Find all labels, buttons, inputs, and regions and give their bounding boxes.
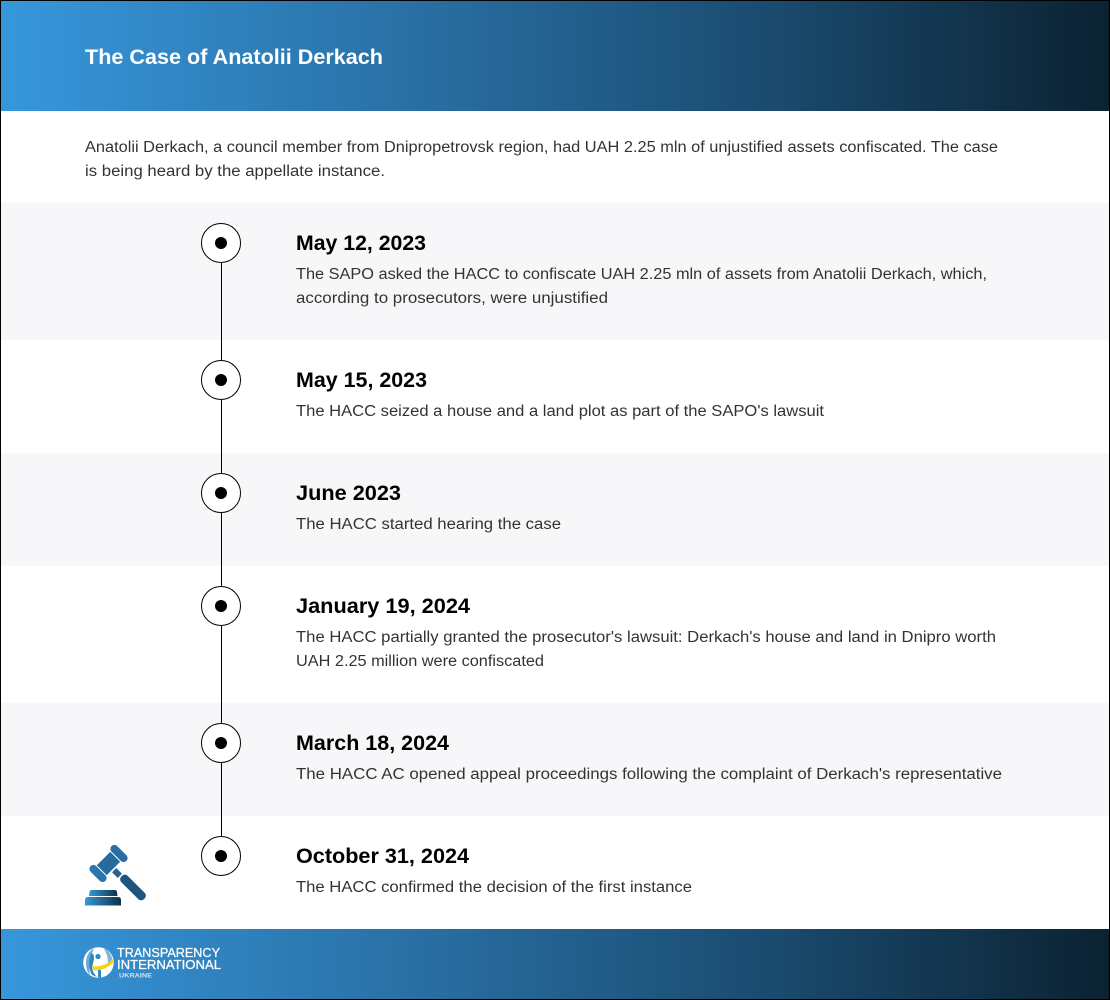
header band <box>0 0 1110 111</box>
intro text: is being heard by the appellate instance. <box>85 163 385 180</box>
date: January 19, 2024 <box>296 595 470 618</box>
date: March 18, 2024 <box>296 732 449 755</box>
timeline event: March 18, 2024 <box>202 724 1002 783</box>
logo text: UKRAINE <box>119 972 153 980</box>
intro text: Anatolii Derkach, a council member from Dnipropetrovsk region, had UAH 2.25 mln of unjustified assets confiscated. The case <box>85 139 998 156</box>
description <box>296 266 987 307</box>
title: The Case of Anatolii Derkach <box>85 46 383 69</box>
marker <box>202 224 240 262</box>
marker <box>202 836 240 876</box>
date: May 15, 2023 <box>296 369 427 392</box>
marker <box>202 724 240 762</box>
description: The HACC confirmed the decision of the first instance <box>296 879 692 896</box>
description: The SAPO asked the HACC to confiscate UAH 2.25 mln of assets from Anatolii Derkach, which, <box>296 266 987 283</box>
date: May 12, 2023 <box>296 232 426 255</box>
intro text <box>85 139 998 180</box>
description: according to prosecutors, were unjustified <box>296 290 608 307</box>
row backgrounds <box>0 203 1110 816</box>
marker <box>202 474 240 512</box>
marker <box>202 586 240 626</box>
timeline line <box>221 243 222 856</box>
description: The HACC seized a house and a land plot as part of the SAPO's lawsuit <box>296 403 825 420</box>
description: UAH 2.25 million were confiscated <box>296 653 544 670</box>
timeline event: May 15, 2023 <box>202 360 825 420</box>
timeline event: January 19, 2024 <box>202 586 996 670</box>
date: June 2023 <box>296 482 401 505</box>
description: The HACC partially granted the prosecutor's lawsuit: Derkach's house and land in Dnipro worth <box>296 629 996 646</box>
logo text <box>117 946 221 980</box>
logo globe <box>83 947 114 978</box>
logo text: TRANSPARENCY <box>117 946 221 960</box>
description <box>296 629 996 670</box>
icon: gavel <box>85 843 147 906</box>
timeline event: May 12, 2023 <box>202 224 987 307</box>
logo: Transparency International Ukraine <box>83 946 221 980</box>
logo text: INTERNATIONAL <box>117 958 221 972</box>
footer band <box>0 929 1110 999</box>
timeline event: June 2023 <box>202 474 561 533</box>
date: October 31, 2024 <box>296 845 469 868</box>
timeline event: October 31, 2024 <box>202 836 692 896</box>
marker <box>202 360 240 400</box>
description: The HACC AC opened appeal proceedings following the complaint of Derkach's representative <box>296 766 1002 783</box>
description: The HACC started hearing the case <box>296 516 561 533</box>
